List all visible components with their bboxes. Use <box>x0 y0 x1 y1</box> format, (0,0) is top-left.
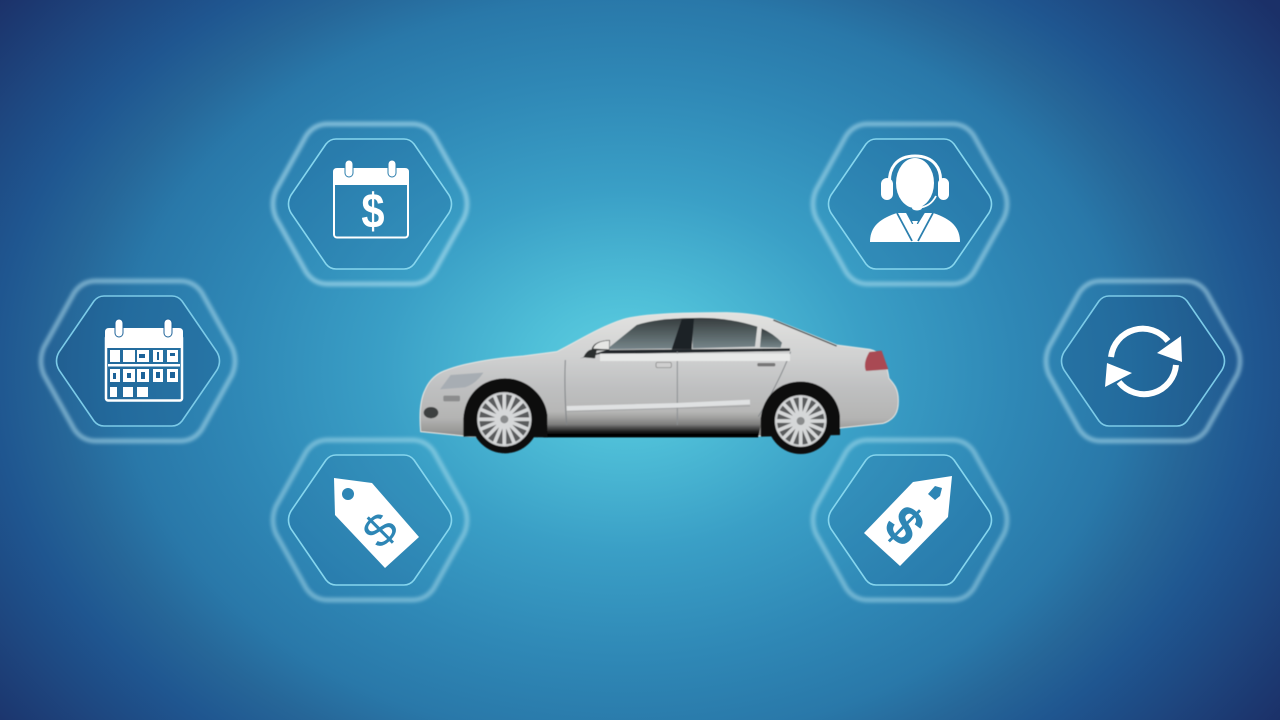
tail light <box>865 351 888 371</box>
door lines and handles <box>565 352 791 425</box>
panel: calendar with dollar sign <box>273 124 467 284</box>
front wheel <box>463 378 547 453</box>
panel: renewal cycle <box>1046 281 1240 441</box>
rear wheel <box>761 382 840 454</box>
mirror <box>583 340 610 358</box>
icon: calendar dollar <box>333 160 409 239</box>
car <box>420 313 898 454</box>
icon: circular arrows <box>1105 329 1182 394</box>
icon: agent with headset <box>870 156 960 242</box>
car body <box>420 313 898 437</box>
icon: calendar dollar: $ <box>361 184 385 239</box>
icon: price tag <box>334 478 419 568</box>
icon: price tag mirrored: $ <box>872 494 936 558</box>
panel: customer support <box>813 124 1007 284</box>
panel: price tag left <box>273 440 467 600</box>
panel: price tag right <box>813 440 1007 600</box>
door sill shadow <box>543 412 763 437</box>
icon: calendar grid <box>105 319 183 400</box>
windows <box>580 318 837 358</box>
icon: price tag: $ <box>353 503 408 558</box>
panel: monthly calendar <box>41 281 235 441</box>
head light and front details <box>424 373 483 418</box>
icon: price tag mirrored <box>864 476 952 566</box>
